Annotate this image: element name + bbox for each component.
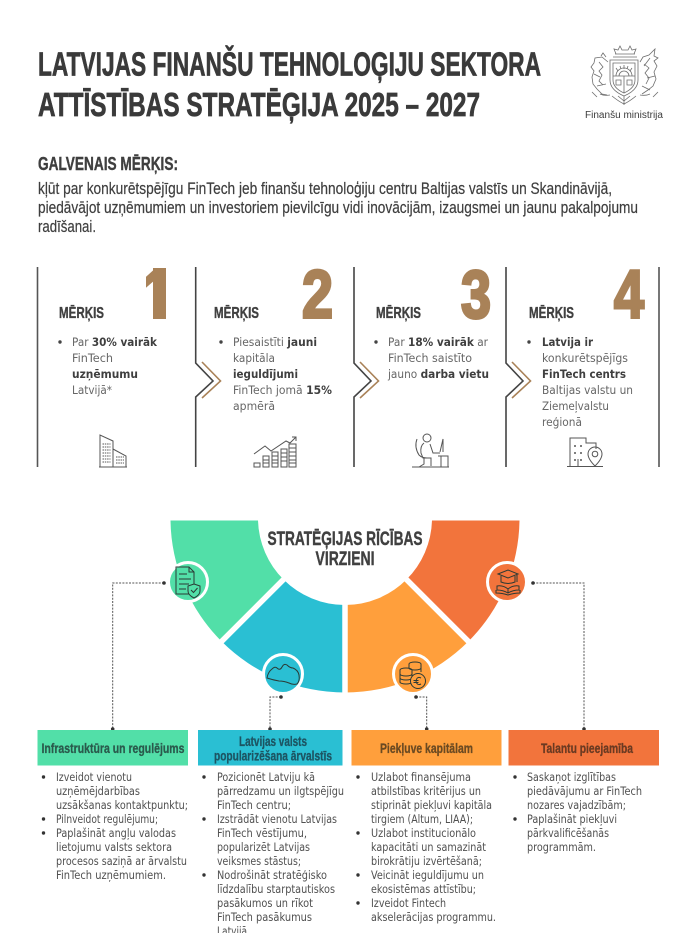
- goal 2 label: MĒRĶIS: [214, 303, 259, 322]
- segment: capital: [345, 580, 468, 693]
- text block: infrastructure actions: lietojumu valsts sektora: [56, 841, 172, 854]
- text block: capital actions: atbilstības kritērijus un: [371, 785, 481, 798]
- icon: growth chart with coins: [254, 437, 296, 467]
- panel: promotion header: [198, 730, 342, 766]
- goal 1 text: FinTech: [72, 351, 113, 365]
- icon: map of Latvia: [264, 654, 302, 694]
- text block: infrastructure actions: [42, 771, 188, 882]
- title: [38, 44, 541, 123]
- goal 3 text: [374, 335, 489, 381]
- title: ATTĪSTĪBAS STRATĒĢIJA 2025 – 2027: [38, 86, 480, 123]
- number 1: 1: [143, 256, 170, 332]
- text block: talent actions: programmām.: [527, 841, 596, 854]
- text block: infrastructure actions: Izveidot vienotu: [56, 771, 132, 784]
- goal 2 text: ieguldījumi: [233, 367, 298, 381]
- text block: capital actions: Veicināt ieguldījumu un: [371, 869, 484, 882]
- goal 3 text: Par 18% vairāk ar: [388, 335, 488, 349]
- column dividers with chevrons: [38, 267, 659, 467]
- panel: goal 1: [58, 256, 170, 467]
- text block: promotion actions: FinTech vēstījumu,: [217, 827, 307, 840]
- text block: promotion actions: FinTech pasākumus: [217, 911, 312, 924]
- text block: capital actions: tirgiem (Altum, LIAA);: [371, 813, 473, 826]
- panel: talent header: Talantu pieejamība: [541, 741, 633, 756]
- goal 2 text: FinTech jomā 15%: [233, 383, 332, 397]
- text block: promotion actions: veiksmes stāstus;: [217, 855, 301, 868]
- chart: semicircle of strategic directions: [170, 520, 520, 697]
- text block: infrastructure actions: uzņēmējdarbības: [56, 785, 140, 798]
- icon: person at desk: [412, 434, 449, 467]
- panel: infrastructure header: Infrastruktūra un regulējums: [42, 741, 184, 756]
- text block: capital actions: ekosistēmas attīstību;: [371, 883, 476, 896]
- text block: promotion actions: pārredzamu un ilgtspējīgu: [217, 785, 344, 798]
- panel: promotion header: popularizēšana ārvalstīs: [214, 748, 332, 764]
- text block: capital actions: kapacitāti un samazināt: [371, 841, 487, 854]
- text block: infrastructure actions: uzsākšanas kontaktpunktu;: [56, 799, 188, 812]
- goal 4 text: Baltijas valstu un: [542, 383, 633, 397]
- panel: goal 2: [214, 256, 333, 467]
- icon: building with location pin: [567, 438, 603, 466]
- connector: talent: [531, 581, 586, 731]
- goal 1 label: MĒRĶIS: [59, 303, 104, 322]
- icon: coins with euro: [394, 654, 432, 694]
- text block: talent actions: pārkvalificēšanās: [527, 827, 609, 840]
- panel: capital header: [352, 730, 502, 766]
- connector: infrastructure: [111, 581, 166, 731]
- number 2: 2: [302, 256, 333, 332]
- text block: talent actions: nozares vajadzībām;: [527, 799, 626, 812]
- heading: strategic directions: STRATĒĢIJAS RĪCĪBAS: [268, 528, 422, 550]
- goal 4 text: Latvija ir: [542, 335, 593, 349]
- segment: promotion: [222, 580, 345, 692]
- panel: goal 4: [527, 256, 644, 466]
- goal 3 label: MĒRĶIS: [376, 303, 421, 322]
- goal 3 text: FinTech saistīto: [388, 351, 472, 365]
- logo: Finanšu ministrija emblem: Finanšu ministrija: [585, 110, 664, 121]
- text block: infrastructure actions: procesos saziņā ar ārvalstu: [56, 855, 187, 868]
- panel: capital header: Piekļuve kapitālam: [380, 741, 473, 756]
- text block: main goal description: radīšanai.: [38, 217, 96, 236]
- text block: promotion actions: Izstrādāt vienotu Latvijas: [217, 813, 337, 826]
- panel: infrastructure header: [38, 730, 188, 766]
- panel: goal 3: [374, 256, 491, 467]
- connector: capital: [414, 695, 429, 731]
- heading: main goal: GALVENAIS MĒRĶIS:: [38, 154, 178, 174]
- goal 4 text: reģionā: [542, 415, 582, 429]
- text block: infrastructure actions: Pilnveidot regulējumu;: [56, 813, 158, 826]
- goal 2 text: [219, 335, 332, 413]
- segment: infrastructure: [170, 520, 284, 641]
- panel: promotion header: Latvijas valsts: [239, 734, 307, 749]
- panel: talent header: [508, 730, 659, 766]
- text block: promotion actions: FinTech centru;: [217, 799, 291, 812]
- segment: talent: [406, 520, 520, 641]
- number 4: 4: [614, 256, 644, 332]
- number 3: 3: [461, 256, 491, 332]
- text block: capital actions: Uzlabot finansējuma: [371, 771, 471, 784]
- heading: strategic directions: VIRZIENI: [316, 548, 374, 570]
- heading: strategic directions: [268, 528, 422, 570]
- goal 1 text: Par 30% vairāk: [72, 335, 157, 349]
- goal 4 label: MĒRĶIS: [529, 303, 574, 322]
- text block: infrastructure actions: FinTech uzņēmumiem.: [56, 869, 166, 882]
- goal 1 text: [58, 335, 157, 397]
- text block: promotion actions: Pozicionēt Latviju kā: [217, 771, 315, 784]
- goal 4 text: FinTech centrs: [542, 367, 626, 381]
- goal 2 text: kapitāla: [233, 351, 275, 365]
- connector: promotion: [268, 695, 283, 731]
- text block: capital actions: [356, 771, 496, 924]
- text block: main goal description: [38, 179, 638, 236]
- text block: promotion actions: popularizēt Latvijas: [217, 841, 310, 854]
- icon: document with shield: [168, 562, 208, 602]
- goal 4 text: Ziemeļvalstu: [542, 399, 609, 413]
- text block: promotion actions: Nodrošināt stratēģisko: [217, 869, 327, 882]
- goal 1 text: Latvijā*: [72, 383, 112, 397]
- text block: talent actions: [513, 771, 642, 854]
- text block: infrastructure actions: Paplašināt angļu valodas: [56, 827, 176, 840]
- goal 4 text: konkurētspējīgs: [542, 351, 628, 365]
- text block: capital actions: Izveidot Fintech: [371, 897, 446, 910]
- text block: capital actions: birokrātiju izvērtēšanā;: [371, 855, 482, 868]
- text block: talent actions: piedāvājumu ar FinTech: [527, 785, 642, 798]
- text block: promotion actions: [202, 771, 344, 933]
- goal 4 text: [527, 335, 633, 429]
- text block: talent actions: Paplašināt piekļuvi: [527, 813, 617, 826]
- number 1: [146, 268, 166, 319]
- goal 1 text: uzņēmumu: [72, 367, 138, 381]
- icon: graduation cap and book: [488, 562, 526, 602]
- icon: office buildings: [99, 435, 127, 467]
- text block: capital actions: akselerācijas programmu.: [371, 911, 496, 924]
- text block: promotion actions: pasākumos un rīkot: [217, 897, 314, 910]
- goal 3 text: jauno darba vietu: [387, 367, 489, 381]
- text block: talent actions: Saskaņot izglītības: [527, 771, 616, 784]
- text block: capital actions: Uzlabot institucionālo: [371, 827, 476, 840]
- logo: Finanšu ministrija emblem: [585, 46, 664, 121]
- text block: capital actions: stiprināt piekļuvi kapitāla: [371, 799, 492, 812]
- goal 2 text: Piesaistīti jauni: [233, 335, 317, 349]
- goal 2 text: apmērā: [233, 399, 275, 413]
- text block: promotion actions: līdzdalību starptautiskos: [217, 883, 335, 896]
